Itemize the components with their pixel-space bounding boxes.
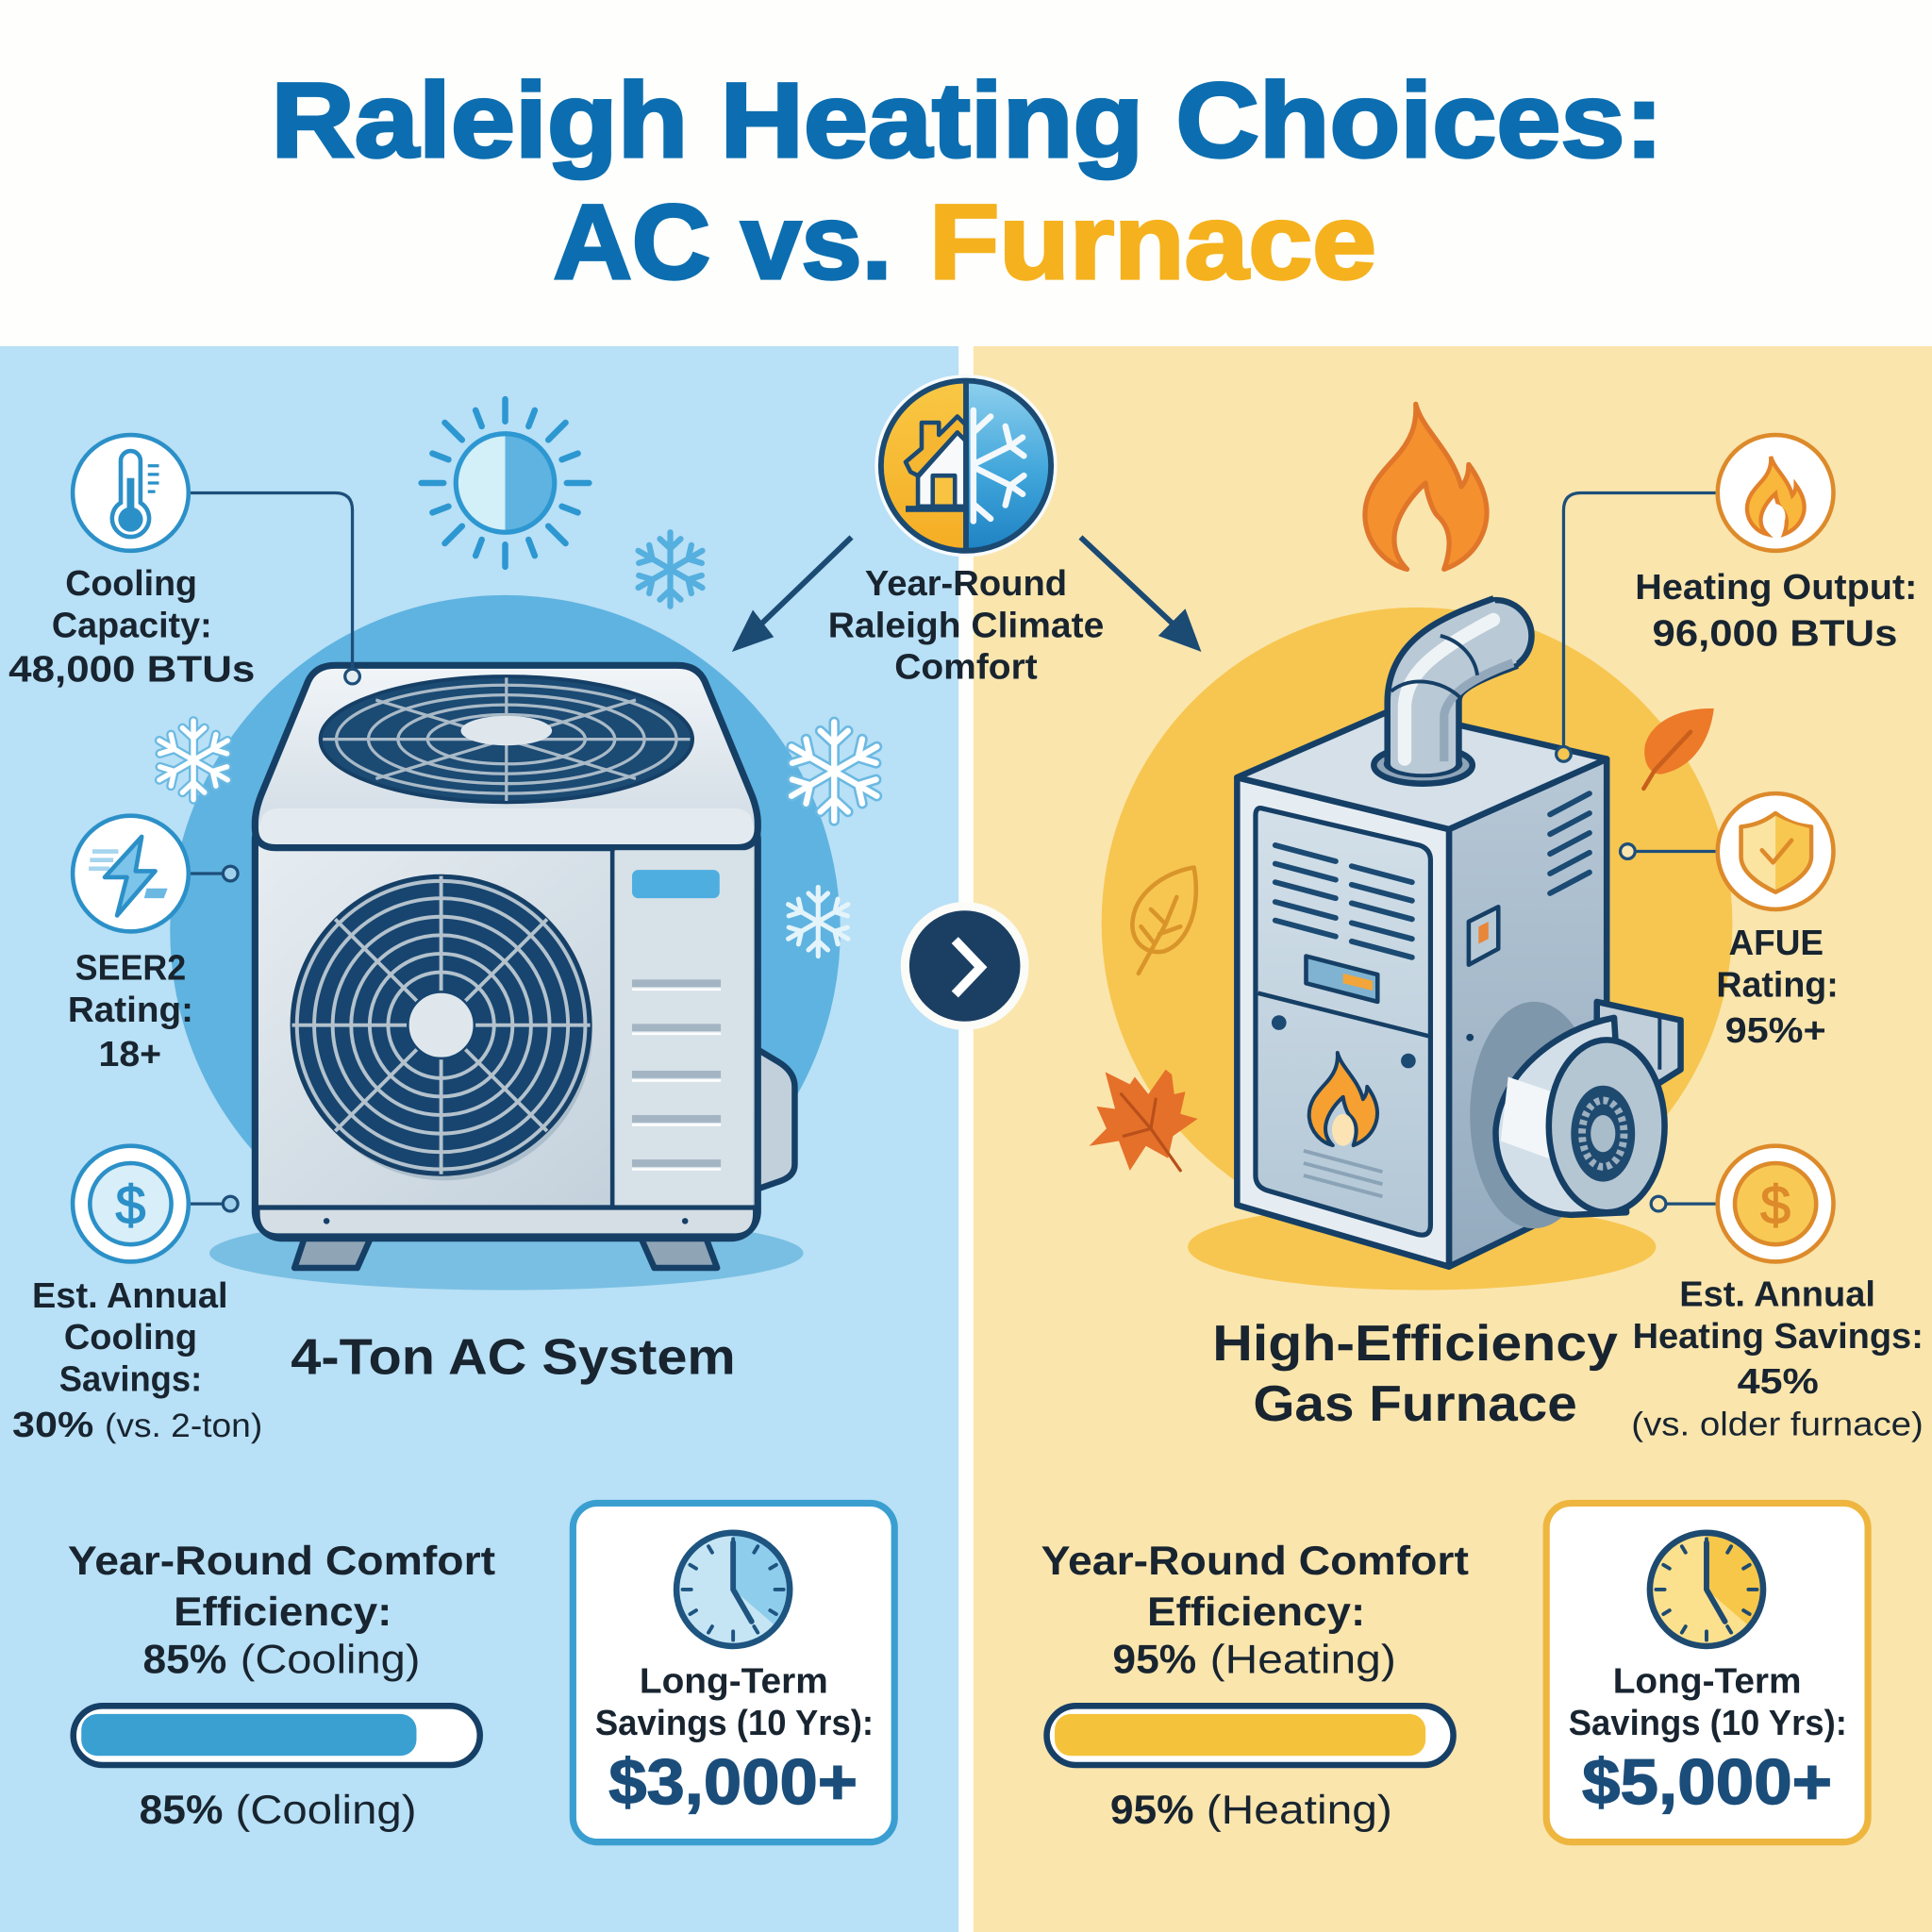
flue pipe (1374, 597, 1535, 784)
icon: snowflake top (633, 532, 708, 607)
efficiency block: cooling: 85% (143, 1637, 226, 1682)
feet (294, 1235, 372, 1268)
house (906, 416, 966, 508)
center badge: climate icon (874, 375, 1058, 557)
label: Capacity: (52, 607, 212, 645)
icon: snowflake left (154, 721, 233, 800)
label: SEER2 (75, 949, 186, 989)
icon: orange leaf (1643, 708, 1714, 789)
label: Cooling (64, 1319, 197, 1357)
callout: heating output (1557, 435, 1917, 761)
front vents (1275, 845, 1412, 958)
callout: cooling capacity (8, 435, 359, 690)
label: Cooling (65, 564, 197, 604)
side vents (1550, 793, 1590, 893)
heading: gas furnace: Gas Furnace (1253, 1375, 1577, 1432)
callout: AFUE rating (1621, 793, 1839, 1051)
heading: gas furnace: High-Efficiency (1212, 1315, 1618, 1372)
icon: gold coin (1718, 1146, 1834, 1261)
louvers (632, 979, 721, 1167)
efficiency block: heating: (Heating) (1207, 1787, 1392, 1832)
label: Heating Output: (1635, 568, 1917, 608)
icon: dollar coin: $ (115, 1175, 145, 1236)
arrow: to AC (732, 537, 852, 652)
label: Est. Annual (1679, 1275, 1875, 1315)
icon: large flame (1365, 404, 1487, 569)
blower shadow (1470, 1002, 1598, 1228)
connector (189, 492, 353, 668)
label: (vs. 2-ton) (105, 1407, 262, 1444)
icon: dollar coin (73, 1146, 189, 1261)
door panel (1256, 808, 1430, 1235)
icon: outline leaf (1132, 868, 1196, 974)
side access plate (1469, 907, 1498, 965)
label (1716, 924, 1839, 1051)
label (8, 564, 255, 690)
icon: snowflake lower (783, 887, 853, 957)
label: AFUE (1728, 924, 1824, 963)
blue backdrop circle (170, 595, 841, 1265)
card: furnace long-term savings: $5,000+ (1582, 1747, 1832, 1819)
label: center climate text (828, 564, 1104, 688)
illustration: gas furnace (1237, 597, 1681, 1267)
callout: cooling savings (12, 1146, 262, 1445)
label: center climate text: Comfort (894, 648, 1038, 688)
icon: clock (676, 1533, 790, 1646)
icon: door flame (1309, 1053, 1377, 1146)
card: furnace long-term savings: Long-Term (1613, 1662, 1802, 1702)
illustration: outdoor AC unit (255, 665, 794, 1268)
floor shadow (209, 1216, 804, 1291)
label: 95%+ (1725, 1011, 1826, 1051)
label: Heating Savings: (1633, 1317, 1924, 1357)
card: AC long-term savings: $3,000+ (608, 1747, 858, 1819)
efficiency block: heating: Efficiency: (1147, 1589, 1365, 1634)
label: 45% (1738, 1363, 1819, 1402)
control label (632, 870, 720, 898)
callout: heating savings (1631, 1146, 1924, 1442)
efficiency block: cooling (68, 1538, 495, 1832)
top fan grille (321, 676, 692, 802)
front face (1237, 777, 1449, 1267)
efficiency block: cooling: (Cooling) (235, 1787, 416, 1832)
floor shadow (1188, 1204, 1656, 1291)
card: furnace long-term savings: Savings (10 Yrs): (1569, 1704, 1847, 1743)
title: Furnace (929, 184, 1376, 302)
label: 48,000 BTUs (8, 649, 255, 690)
card: AC long-term savings: Long-Term (640, 1662, 828, 1702)
progress bar (74, 1706, 480, 1765)
label (1631, 1275, 1924, 1442)
base band (258, 1208, 756, 1236)
icon: center chevron button (901, 902, 1029, 1030)
card: AC long-term savings: Savings (10 Yrs): (595, 1704, 874, 1743)
label: Est. Annual (32, 1276, 228, 1316)
icon: clock (1650, 1533, 1763, 1646)
icon: gold coin: $ (1760, 1175, 1790, 1236)
half snowflake (974, 410, 1024, 521)
icon: snowflake right (785, 722, 884, 821)
top face (1237, 709, 1607, 829)
label: center climate text: Raleigh Climate (828, 607, 1104, 645)
title: Raleigh Heating Choices: (271, 61, 1663, 180)
efficiency block: cooling: Efficiency: (174, 1589, 391, 1634)
blower housing (1496, 1018, 1626, 1215)
side face (1449, 759, 1607, 1267)
efficiency block: cooling: 85% (140, 1787, 223, 1832)
label (12, 1276, 262, 1445)
label: center climate text: Year-Round (865, 564, 1067, 604)
label: 18+ (98, 1035, 161, 1074)
heading: gas furnace (1212, 1315, 1618, 1432)
blower fan (1571, 1086, 1635, 1182)
panel: air conditioner (0, 346, 958, 1932)
label (1635, 568, 1917, 655)
label: (vs. older furnace) (1631, 1406, 1924, 1442)
icon: thermometer (73, 435, 189, 551)
divider (610, 848, 614, 1208)
icon: half sun (422, 399, 589, 567)
icon: flame badge (1718, 435, 1834, 551)
icon: lightning bolt (73, 816, 189, 931)
callout: SEER2 rating (68, 816, 238, 1074)
label: 96,000 BTUs (1653, 613, 1897, 655)
efficiency block: cooling: (Cooling) (241, 1637, 420, 1682)
front fan grille (292, 876, 592, 1180)
efficiency block: heating: 95% (1112, 1637, 1196, 1682)
title: AC vs. (553, 184, 892, 302)
panel: furnace (974, 346, 1932, 1932)
label: Rating: (1716, 966, 1839, 1006)
lid (255, 665, 758, 848)
icon: maple leaf (1090, 1070, 1198, 1171)
title (271, 61, 1663, 302)
blower outlet (1597, 1002, 1681, 1084)
display (1306, 957, 1377, 1002)
efficiency block: heating: Year-Round Comfort (1041, 1538, 1469, 1583)
arrow: to furnace (1080, 537, 1201, 652)
card: AC long-term savings (573, 1503, 894, 1842)
efficiency block: heating: (Heating) (1210, 1637, 1396, 1682)
side bump (754, 1047, 794, 1191)
efficiency block: heating: 95% (1110, 1787, 1194, 1832)
label (68, 949, 193, 1074)
cabinet (255, 813, 758, 1239)
yellow backdrop circle (1102, 608, 1732, 1239)
efficiency block: cooling: Year-Round Comfort (68, 1538, 495, 1583)
label: 30% (12, 1406, 94, 1445)
efficiency block: heating (1041, 1538, 1469, 1832)
progress bar (1047, 1706, 1454, 1765)
label: Savings: (59, 1360, 202, 1400)
card: furnace long-term savings (1546, 1503, 1868, 1842)
label: Rating: (68, 991, 193, 1030)
icon: shield check (1718, 793, 1834, 909)
heading: AC system: 4-Ton AC System (291, 1328, 736, 1385)
